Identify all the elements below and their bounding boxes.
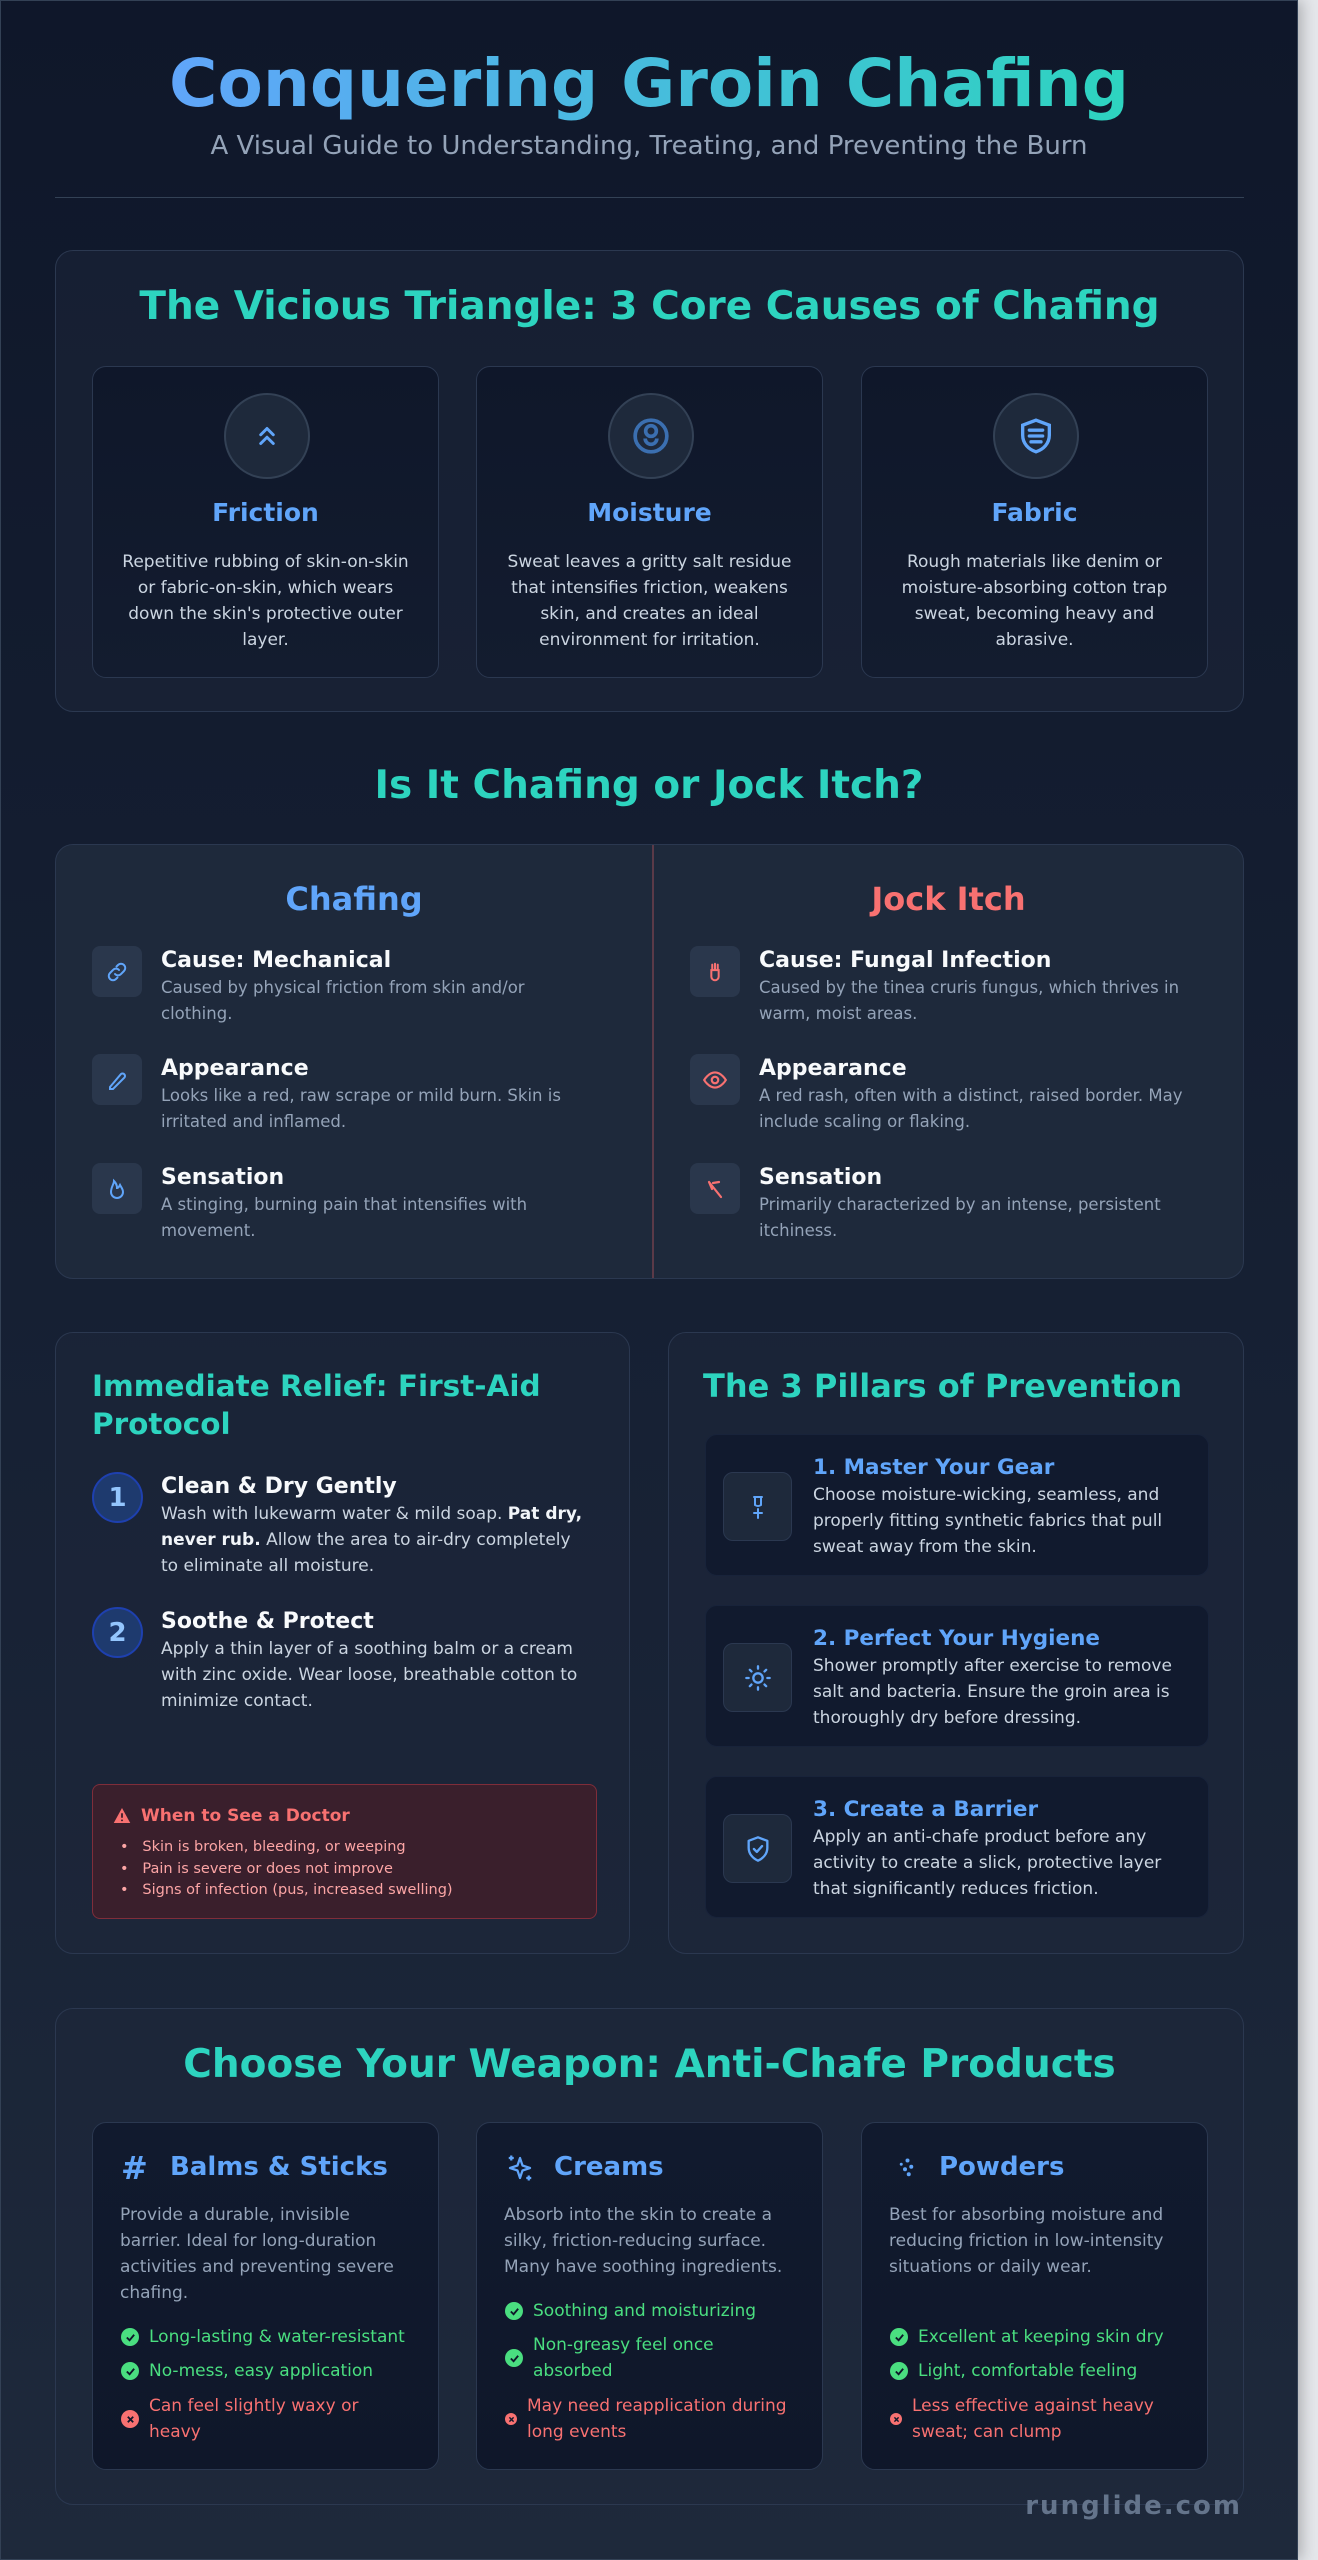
card: moisture: environment for irritation. — [539, 630, 760, 650]
row: jock sensation: Sensation — [759, 1165, 882, 1190]
pillar 1: Choose moisture-wicking, seamless, and — [813, 1485, 1159, 1505]
row: jock cause: Cause: Fungal Infection — [759, 948, 1051, 973]
card: moisture — [476, 366, 823, 678]
card: balms: heavy — [149, 2422, 201, 2442]
heading: products: Choose Your Weapon: Anti-Chafe Products — [183, 2042, 1116, 2087]
row: chafing cause — [92, 946, 525, 1023]
watermark: runglide.com — [1025, 2491, 1242, 2521]
icon: drop — [608, 393, 694, 479]
step 1: never rub. Allow the area to air-dry completely — [161, 1530, 571, 1550]
card: fabric: moisture-absorbing cotton trap — [902, 578, 1167, 598]
card: creams: Absorb into the skin to create a — [504, 2205, 772, 2225]
heading: chafing vs jock itch: Is It Chafing or Jock Itch? — [374, 763, 924, 808]
card: powders: Less effective against heavy — [912, 2396, 1154, 2416]
step 1: 1 — [108, 1482, 127, 1512]
card: creams: silky, friction-reducing surface. — [504, 2231, 766, 2251]
card: powders: Best for absorbing moisture and — [889, 2205, 1163, 2225]
row: chafing sensation: Sensation — [161, 1165, 284, 1190]
card: powders: Excellent at keeping skin dry — [918, 2327, 1164, 2347]
pillar 1: 1. Master Your Gear — [813, 1455, 1054, 1480]
row: chafing cause: Cause: Mechanical — [161, 948, 391, 973]
row: jock cause: warm, moist areas. — [759, 1004, 917, 1023]
callout: see a doctor: When to See a Doctor — [141, 1806, 350, 1826]
callout: see a doctor — [92, 1784, 597, 1919]
title: Conquering Groin Chafing — [169, 45, 1129, 122]
heading: first aid: Immediate Relief: First-Aid — [92, 1369, 541, 1403]
callout: see a doctor: • Pain is severe or does not improve — [120, 1860, 393, 1876]
card: moisture: that intensifies friction, weakens — [511, 578, 788, 598]
card: balms: No-mess, easy application — [149, 2361, 373, 2381]
step 2: 2 — [108, 1618, 127, 1648]
pillar 3: 3. Create a Barrier — [813, 1797, 1038, 1822]
card: friction — [92, 366, 439, 678]
card: fabric: sweat, becoming heavy and — [915, 604, 1154, 624]
row: jock sensation: Primarily characterized by an intense, persistent — [759, 1195, 1161, 1214]
card: friction: Friction — [212, 498, 319, 527]
icon: sparkles — [508, 2156, 532, 2180]
card: creams: absorbed — [533, 2361, 612, 2381]
pillar 3 — [705, 1776, 1209, 1918]
callout: see a doctor: • Skin is broken, bleeding, or weeping — [120, 1839, 406, 1855]
row: chafing sensation: movement. — [161, 1221, 255, 1240]
row: chafing sensation — [92, 1163, 527, 1240]
heading: chafing: Chafing — [285, 880, 423, 918]
card: friction: or fabric-on-skin, which wears — [138, 578, 393, 598]
step 2 — [92, 1607, 577, 1711]
step 2: Soothe & Protect — [161, 1609, 374, 1634]
row: chafing appearance — [92, 1054, 561, 1131]
card: powders: situations or daily wear. — [889, 2257, 1092, 2277]
row: chafing sensation: A stinging, burning pain that intensifies with — [161, 1195, 527, 1214]
pillar 3: that significantly reduces friction. — [813, 1879, 1099, 1899]
heading: prevention: The 3 Pillars of Prevention — [703, 1367, 1182, 1405]
panel: prevention — [668, 1332, 1244, 1954]
row: jock appearance: include scaling or flaking. — [759, 1112, 970, 1131]
row: jock appearance — [690, 1054, 1183, 1131]
card: creams: Many have soothing ingredients. — [504, 2257, 782, 2277]
card: balms: activities and preventing severe — [120, 2257, 394, 2277]
row: jock sensation: itchiness. — [759, 1221, 837, 1240]
card: powders: reducing friction in low-intensity — [889, 2231, 1163, 2251]
card: friction: down the skin's protective outer — [128, 604, 403, 624]
pillar 3: Apply an anti-chafe product before any — [813, 1827, 1146, 1847]
row: jock sensation — [690, 1163, 1161, 1240]
heading: jock itch: Jock Itch — [871, 880, 1026, 918]
card: friction: Repetitive rubbing of skin-on-skin — [122, 552, 409, 572]
card: balms: Provide a durable, invisible — [120, 2205, 350, 2225]
icon: chevrons — [224, 393, 310, 479]
card: fabric: abrasive. — [995, 630, 1074, 650]
card: powders: Powders — [939, 2152, 1064, 2182]
step 1 — [92, 1472, 582, 1576]
icon: warning — [114, 1808, 130, 1823]
row: chafing cause: Caused by physical friction from skin and/or — [161, 978, 525, 997]
step 1: Clean & Dry Gently — [161, 1474, 397, 1499]
row: chafing appearance: Appearance — [161, 1056, 309, 1081]
card: creams — [476, 2122, 823, 2470]
card: fabric: Rough materials like denim or — [907, 552, 1162, 572]
heading: vicious triangle: The Vicious Triangle: 3 Core Causes of Chafing — [139, 284, 1160, 329]
panel: first aid — [55, 1332, 630, 1954]
card: balms: chafing. — [120, 2283, 188, 2303]
step 2: with zinc oxide. Wear loose, breathable cotton to — [161, 1665, 577, 1685]
card: balms: Long-lasting & water-resistant — [149, 2327, 405, 2347]
icon: shield fabric — [993, 393, 1079, 479]
card: fabric: Fabric — [991, 498, 1078, 527]
step 2: Apply a thin layer of a soothing balm or a cream — [161, 1639, 573, 1659]
subtitle: A Visual Guide to Understanding, Treating, and Preventing the Burn — [210, 131, 1088, 161]
row: jock appearance: Appearance — [759, 1056, 907, 1081]
card: friction: layer. — [242, 630, 289, 650]
pillar 2: thoroughly dry before dressing. — [813, 1708, 1081, 1728]
card: creams: Non-greasy feel once — [533, 2335, 714, 2355]
heading: first aid: Protocol — [92, 1407, 231, 1441]
icon: dust — [900, 2158, 914, 2176]
step 2: minimize contact. — [161, 1691, 313, 1711]
step 1: to eliminate all moisture. — [161, 1556, 374, 1576]
card: powders — [861, 2122, 1208, 2470]
row: chafing appearance: Looks like a red, raw scrape or mild burn. Skin is — [161, 1086, 561, 1105]
card: moisture: Sweat leaves a gritty salt residue — [508, 552, 791, 572]
row: jock appearance: A red rash, often with a distinct, raised border. May — [759, 1086, 1183, 1105]
pillar 2 — [705, 1605, 1209, 1747]
row: jock cause: Caused by the tinea cruris fungus, which thrives in — [759, 978, 1179, 997]
pillar 1 — [705, 1434, 1209, 1576]
card: balms — [92, 2122, 439, 2470]
card: balms: barrier. Ideal for long-duration — [120, 2231, 376, 2251]
panel: comparison — [55, 844, 1244, 1279]
card: powders: sweat; can clump — [912, 2422, 1062, 2442]
pillar 1: properly fitting synthetic fabrics that pull — [813, 1511, 1162, 1531]
pillar 3: activity to create a slick, protective layer — [813, 1853, 1161, 1873]
row: chafing appearance: irritated and inflamed. — [161, 1112, 346, 1131]
pillar 2: Shower promptly after exercise to remove — [813, 1656, 1172, 1676]
card: creams: Creams — [554, 2152, 664, 2182]
panel: causes — [55, 250, 1244, 712]
card: creams: May need reapplication during — [527, 2396, 787, 2416]
pillar 2: salt and bacteria. Ensure the groin area is — [813, 1682, 1170, 1702]
card: balms: Balms & Sticks — [170, 2152, 388, 2182]
card: creams: Soothing and moisturizing — [533, 2301, 756, 2321]
row: jock cause — [690, 946, 1179, 1023]
row: chafing cause: clothing. — [161, 1004, 232, 1023]
card: powders: Light, comfortable feeling — [918, 2361, 1137, 2381]
step 1: Wash with lukewarm water & mild soap. Pat dry, — [161, 1504, 582, 1524]
callout: see a doctor: • Signs of infection (pus, increased swelling) — [120, 1882, 453, 1898]
pillar 1: sweat away from the skin. — [813, 1537, 1037, 1557]
heading: first aid — [92, 1369, 541, 1441]
icon: hash: # — [121, 2149, 148, 2187]
card: moisture: Moisture — [587, 498, 712, 527]
card: fabric — [861, 366, 1208, 678]
panel: products — [55, 2008, 1244, 2505]
pillar 2: 2. Perfect Your Hygiene — [813, 1626, 1100, 1651]
card: creams: long events — [527, 2422, 626, 2442]
card: moisture: skin, and creates an ideal — [540, 604, 759, 624]
card: balms: Can feel slightly waxy or — [149, 2396, 358, 2416]
